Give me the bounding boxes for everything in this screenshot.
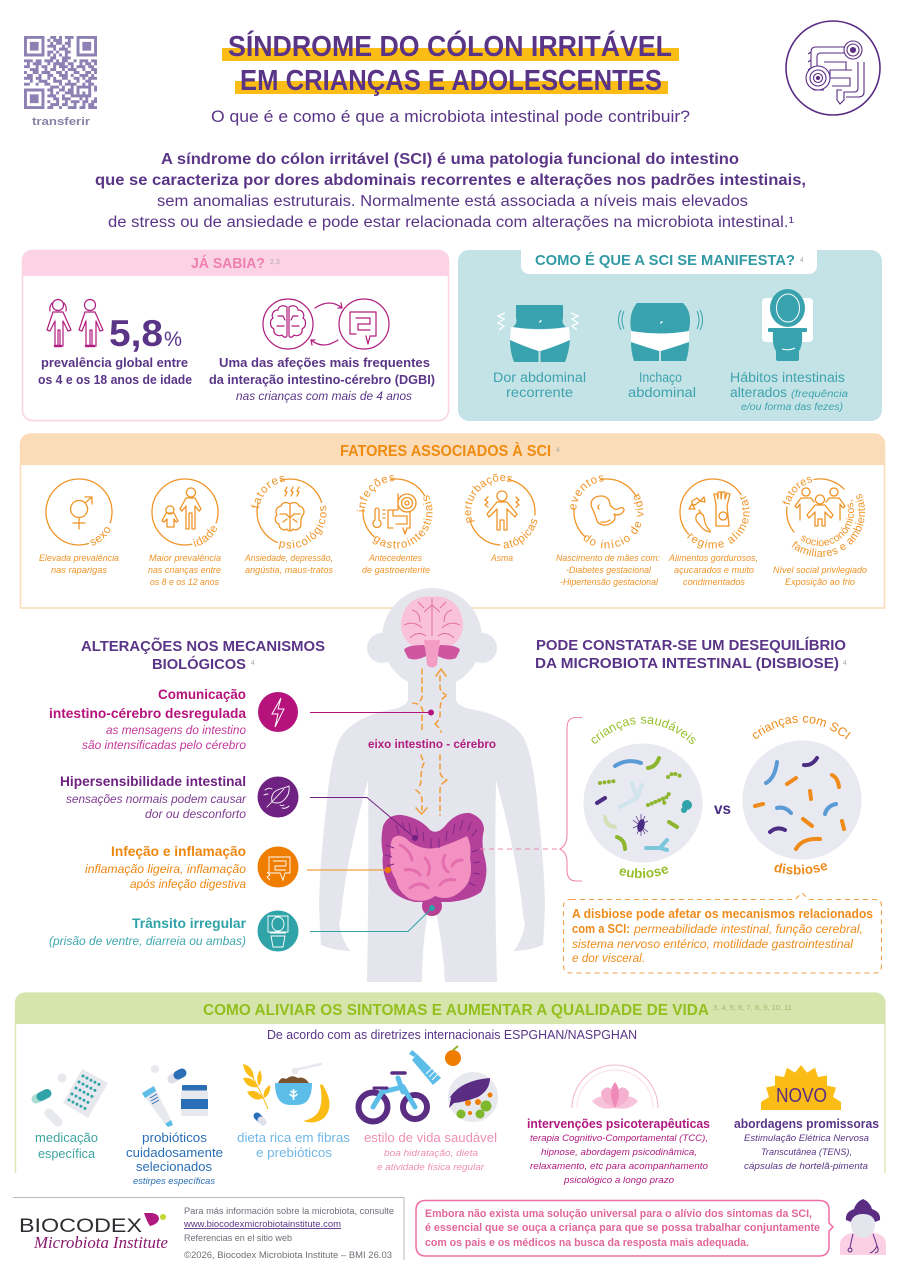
footer: sources bbox=[13, 1198, 404, 1260]
icon: QR code bbox=[24, 36, 97, 128]
factor captions: -Hipertensão gestacional bbox=[560, 577, 659, 588]
mechanism: infeção e inflamação: inflamação ligeira, inflamação bbox=[85, 864, 247, 876]
text: hábitos: alterados bbox=[730, 385, 787, 400]
item: medicação: medicação bbox=[35, 1131, 98, 1145]
callout: closing message: é essencial que se ouça a criança para que se possa trabalhar conjuntamente bbox=[425, 1222, 820, 1234]
item: probióticos: cuidadosamente bbox=[126, 1146, 223, 1160]
text: afeções: nas crianças com mais de 4 anos bbox=[236, 391, 412, 403]
footer: sources: Para más información sobre la microbiota, consulte bbox=[184, 1206, 394, 1216]
item: intervenções psicoterapêuticas: relaxamento, etc para acompanhamento bbox=[530, 1161, 708, 1172]
icon: two children bbox=[47, 300, 103, 346]
factor captions: de gastroenterite bbox=[362, 565, 430, 576]
factor: eventos do início de vida: eventos bbox=[570, 475, 604, 510]
factor: fatores psicológicos: fatores bbox=[251, 476, 285, 508]
text: hábitos bbox=[730, 370, 848, 413]
icon: brain gut cycle bbox=[263, 299, 389, 349]
text: prevalência bbox=[38, 356, 192, 387]
title: EM CRIANÇAS E ADOLESCENTES bbox=[240, 65, 662, 97]
item: dieta rica em fibras: dieta rica em fibras bbox=[237, 1131, 350, 1145]
mechanism: hipersensibilidade: Hipersensibilidade intestinal bbox=[60, 773, 246, 789]
factor: eventos do início de vida: do início de vida bbox=[584, 493, 644, 548]
item: intervenções psicoterapêuticas: terapia Cognitivo-Comportamental (TCC), bbox=[530, 1133, 708, 1144]
heading: disbiose: DA MICROBIOTA INTESTINAL (DISBIOSE) bbox=[535, 656, 839, 672]
icon: intestines bbox=[382, 813, 486, 916]
title: SÍNDROME DO CÓLON IRRITÁVEL bbox=[228, 29, 672, 63]
stat: 5,8%: % bbox=[164, 328, 182, 351]
factor captions: Maior prevalência bbox=[149, 553, 221, 564]
text: hábitos: Hábitos intestinais bbox=[730, 370, 845, 385]
factor: perturbações atópicas: perturbações bbox=[465, 474, 512, 523]
factor: idade bbox=[151, 478, 219, 547]
intro paragraph bbox=[95, 151, 806, 231]
heading: alterações: BIOLÓGICOS bbox=[152, 655, 246, 673]
item: estilo de vida saudável bbox=[358, 1046, 498, 1173]
footer: sources: ©2026, Biocodex Microbiota Institute – BMI 26.03 bbox=[184, 1250, 392, 1260]
callout: disbiose bbox=[564, 893, 882, 973]
factor: infeções gastrointestinais: infeções bbox=[356, 475, 394, 512]
heading: já sabia: JÁ SABIA? bbox=[191, 255, 265, 272]
mechanism: infeção e inflamação: após infeção digestiva bbox=[130, 879, 246, 891]
item: estilo de vida saudável: estilo de vida saudável bbox=[364, 1131, 497, 1145]
factor captions: Exposição ao frio bbox=[785, 577, 855, 588]
callout: disbiose: A disbiose pode afetar os mecanismos relacionados bbox=[572, 907, 873, 921]
panel: fatores associados bbox=[20, 433, 886, 609]
callout: closing message bbox=[416, 1200, 833, 1256]
text: hábitos: (frequência bbox=[791, 389, 848, 400]
heading: alterações: 4 bbox=[251, 660, 255, 667]
mechanism: comunicação: são intensificadas pelo cérebro bbox=[82, 740, 247, 752]
item: intervenções psicoterapêuticas bbox=[527, 1065, 710, 1186]
item: probióticos: probióticos bbox=[142, 1131, 207, 1145]
body silhouette bbox=[319, 588, 545, 982]
factor captions: Asma bbox=[490, 553, 513, 564]
mechanism: infeção e inflamação bbox=[85, 843, 391, 891]
heading: alterações: ALTERAÇÕES NOS MECANISMOS bbox=[81, 637, 325, 655]
footer: logo bbox=[19, 1213, 168, 1252]
text: inchaço: Inchaço bbox=[639, 370, 682, 385]
callout: disbiose: sistema nervoso entérico, motilidade gastrointestinal bbox=[572, 937, 853, 951]
panel: como é que a SCI se manifesta bbox=[458, 250, 882, 421]
callout: closing message: com os pais e os médicos na busca da resposta mais adequada. bbox=[425, 1237, 749, 1249]
title bbox=[222, 29, 679, 97]
heading: aliviar: COMO ALIVIAR OS SINTOMAS E AUMENTAR A QUALIDADE DE VIDA bbox=[203, 1002, 709, 1019]
factor captions: Ansiedade, depressão, bbox=[244, 553, 333, 564]
text: dor abdominal bbox=[493, 370, 586, 400]
intro paragraph: de stress ou de ansiedade e pode estar relacionada com alterações na microbiota intestinal.¹ bbox=[108, 214, 794, 231]
factor captions: Nível social privilegiado bbox=[773, 565, 867, 576]
callout: disbiose: e dor visceral. bbox=[572, 951, 645, 965]
factor captions bbox=[39, 553, 867, 588]
factor: regime alimentar: regime alimentar bbox=[687, 496, 750, 548]
mechanism: trânsito irregular: Trânsito irregular bbox=[132, 915, 247, 931]
icon: QR code: transferir bbox=[32, 116, 91, 128]
mechanism: hipersensibilidade bbox=[60, 773, 418, 841]
stat: 5,8%: 5,8 bbox=[109, 313, 163, 354]
heading: fatores: 4 bbox=[556, 447, 560, 454]
mechanism: hipersensibilidade: dor ou desconforto bbox=[145, 809, 247, 821]
factor captions: Antecedentes bbox=[368, 553, 422, 564]
factor: perturbações atópicas: atópicas bbox=[504, 519, 538, 548]
chart: healthy microbiota bbox=[584, 716, 702, 878]
bracket and dashed link bbox=[480, 718, 582, 881]
factor: infeções gastrointestinais bbox=[356, 475, 433, 548]
callout: disbiose: com a SCI: bbox=[572, 922, 630, 936]
item: intervenções psicoterapêuticas: psicológico a longo prazo bbox=[563, 1175, 674, 1186]
intro paragraph: que se caracteriza por dores abdominais recorrentes e alterações nos padrões intestinais, bbox=[95, 172, 806, 189]
mechanism: hipersensibilidade: sensações normais podem causar bbox=[66, 794, 247, 806]
vs: vs bbox=[714, 801, 731, 818]
item: abordagens promissoras: abordagens promissoras bbox=[734, 1117, 879, 1131]
item: probióticos: estirpes específicas bbox=[133, 1176, 215, 1187]
subtitle: O que é e como é que a microbiota intestinal pode contribuir? bbox=[211, 107, 690, 126]
factor captions: açucarados e muito bbox=[674, 565, 754, 576]
factor: perturbações atópicas bbox=[465, 474, 538, 548]
icon: doctor bbox=[840, 1199, 886, 1255]
factor captions: Nascimento de mães com: bbox=[556, 553, 660, 564]
intro paragraph: sem anomalias estruturais. Normalmente está associada a níveis mais elevados bbox=[157, 193, 748, 210]
icon: abdominal pain bbox=[498, 305, 578, 362]
item: estilo de vida saudável: boa hidratação, dieta bbox=[384, 1148, 478, 1159]
item: abordagens promissoras: cápsulas de hortelã-pimenta bbox=[744, 1161, 868, 1172]
mechanism: infeção e inflamação: Infeção e inflamação bbox=[111, 843, 246, 859]
icon: toilet bbox=[762, 289, 813, 361]
callout: disbiose: permeabilidade intestinal, função cerebral, bbox=[633, 922, 863, 936]
panel: como aliviar os sintomas bbox=[15, 993, 885, 1187]
text: dor abdominal: recorrente bbox=[506, 385, 573, 400]
item: intervenções psicoterapêuticas: intervenções psicoterapêuticas bbox=[527, 1117, 710, 1131]
text: inchaço bbox=[628, 370, 696, 400]
factor captions: os 8 e os 12 anos bbox=[150, 577, 219, 588]
chart: IBS microbiota: disbiose bbox=[774, 863, 828, 875]
factor: sexo bbox=[45, 478, 113, 546]
mechanism: trânsito irregular: (prisão de ventre, diarreia ou ambas) bbox=[49, 936, 246, 948]
factor: fatores psicológicos bbox=[251, 476, 326, 550]
text: prevalência: os 4 e os 18 anos de idade bbox=[38, 373, 192, 387]
factor captions: nas raparigas bbox=[51, 565, 107, 576]
callout: closing message: Embora não exista uma solução universal para o alívio dos sintomas da SCI, bbox=[425, 1208, 812, 1220]
icon: bloating bbox=[618, 303, 702, 361]
text: dor abdominal: Dor abdominal bbox=[493, 370, 586, 385]
factor: eventos do início de vida bbox=[570, 475, 644, 548]
icon: intestine in circle bbox=[786, 21, 880, 115]
chart: IBS microbiota bbox=[742, 716, 862, 875]
text: hábitos: e/ou forma das fezes) bbox=[741, 402, 843, 413]
text: afeções bbox=[209, 356, 435, 403]
item: probióticos: selecionados bbox=[136, 1160, 212, 1174]
footer: logo: BIOCODEX bbox=[19, 1216, 142, 1237]
factor: sexo: sexo bbox=[90, 527, 110, 546]
item: medicação bbox=[35, 1069, 108, 1161]
factor captions: -Diabetes gestacional bbox=[566, 565, 652, 576]
factor: regime alimentar bbox=[679, 478, 750, 548]
chart: IBS microbiota: crianças com SCI bbox=[752, 716, 851, 740]
factor: infeções gastrointestinais: gastrointestinais bbox=[372, 495, 433, 548]
text: inchaço: abdominal bbox=[628, 385, 696, 400]
item: intervenções psicoterapêuticas: hipnose, abordagem psicodinâmica, bbox=[541, 1147, 697, 1158]
heading: disbiose bbox=[535, 637, 847, 672]
heading: manifesta: COMO É QUE A SCI SE MANIFESTA? bbox=[535, 252, 795, 269]
heading: alterações bbox=[81, 637, 325, 673]
item: dieta rica em fibras: e prebióticos bbox=[256, 1146, 332, 1160]
heading: disbiose: 4 bbox=[843, 660, 847, 667]
item: abordagens promissoras: Estimulação Elétrica Nervosa bbox=[744, 1133, 869, 1144]
item: probióticos bbox=[126, 1065, 223, 1187]
text: afeções: da interação intestino-cérebro (DGBI) bbox=[209, 373, 435, 387]
mechanism: comunicação: Comunicação bbox=[158, 686, 246, 702]
mechanism: trânsito irregular bbox=[49, 905, 435, 952]
heading: já sabia: 2,3 bbox=[270, 259, 280, 266]
heading: manifesta: 4 bbox=[800, 257, 804, 264]
mechanism: comunicação: as mensagens do intestino bbox=[106, 725, 247, 737]
icon: brain bbox=[401, 596, 463, 668]
chart: healthy microbiota: crianças saudáveis bbox=[592, 716, 696, 744]
item: estilo de vida saudável: e atividade física regular bbox=[377, 1162, 485, 1173]
factor: fatores socioeconómicos, familiares e ambientais: familiares e ambientais bbox=[792, 494, 865, 558]
footer: logo: Microbiota Institute bbox=[33, 1233, 168, 1252]
footer: sources: www.biocodexmicrobiotainstitute.com bbox=[183, 1219, 341, 1229]
heading: disbiose: PODE CONSTATAR-SE UM DESEQUILÍBRIO bbox=[536, 637, 846, 654]
factor: fatores psicológicos: psicológicos bbox=[278, 506, 326, 550]
heading: aliviar: 3, 4, 5, 6, 7, 8, 9, 10, 11 bbox=[713, 1003, 792, 1012]
factor captions: nas crianças entre bbox=[148, 565, 221, 576]
item: abordagens promissoras: Transcutânea (TENS), bbox=[761, 1147, 852, 1158]
factor: fatores socioeconómicos, familiares e ambientais: socioeconómicos, bbox=[800, 500, 854, 546]
factor: fatores socioeconómicos, familiares e ambientais: fatores bbox=[782, 476, 812, 505]
item: medicação: específica bbox=[38, 1147, 95, 1161]
text: afeções: Uma das afeções mais frequentes bbox=[219, 356, 430, 370]
factor captions: Alimentos gordurosos, bbox=[668, 553, 758, 564]
footer: sources: Referencias en el sitio web bbox=[184, 1233, 292, 1243]
item: abordagens promissoras: NOVO bbox=[776, 1085, 827, 1107]
item: dieta rica em fibras bbox=[237, 1064, 350, 1160]
factor captions: angústia, maus-tratos bbox=[245, 565, 333, 576]
gut-brain axis arrows bbox=[413, 669, 447, 815]
factor: idade: idade bbox=[192, 526, 217, 547]
intro paragraph: A síndrome do cólon irritável (SCI) é uma patologia funcional do intestino bbox=[161, 151, 739, 168]
heading: fatores: FATORES ASSOCIADOS À SCI bbox=[340, 443, 551, 460]
guidelines note: De acordo com as diretrizes internacionais ESPGHAN/NASPGHAN bbox=[267, 1028, 637, 1042]
factor captions: Elevada prevalência bbox=[39, 553, 119, 564]
text: prevalência: prevalência global entre bbox=[41, 356, 188, 370]
chart: healthy microbiota: eubiose bbox=[620, 866, 668, 878]
item: abordagens promissoras bbox=[734, 1065, 879, 1172]
factor captions: condimentados bbox=[683, 577, 745, 588]
mechanism: comunicação: intestino-cérebro desregulada bbox=[49, 705, 246, 721]
panel: já sabia bbox=[22, 250, 449, 420]
label: eixo intestino-cérebro: eixo intestino - cérebro bbox=[368, 739, 496, 751]
mechanism: comunicação bbox=[49, 686, 434, 752]
